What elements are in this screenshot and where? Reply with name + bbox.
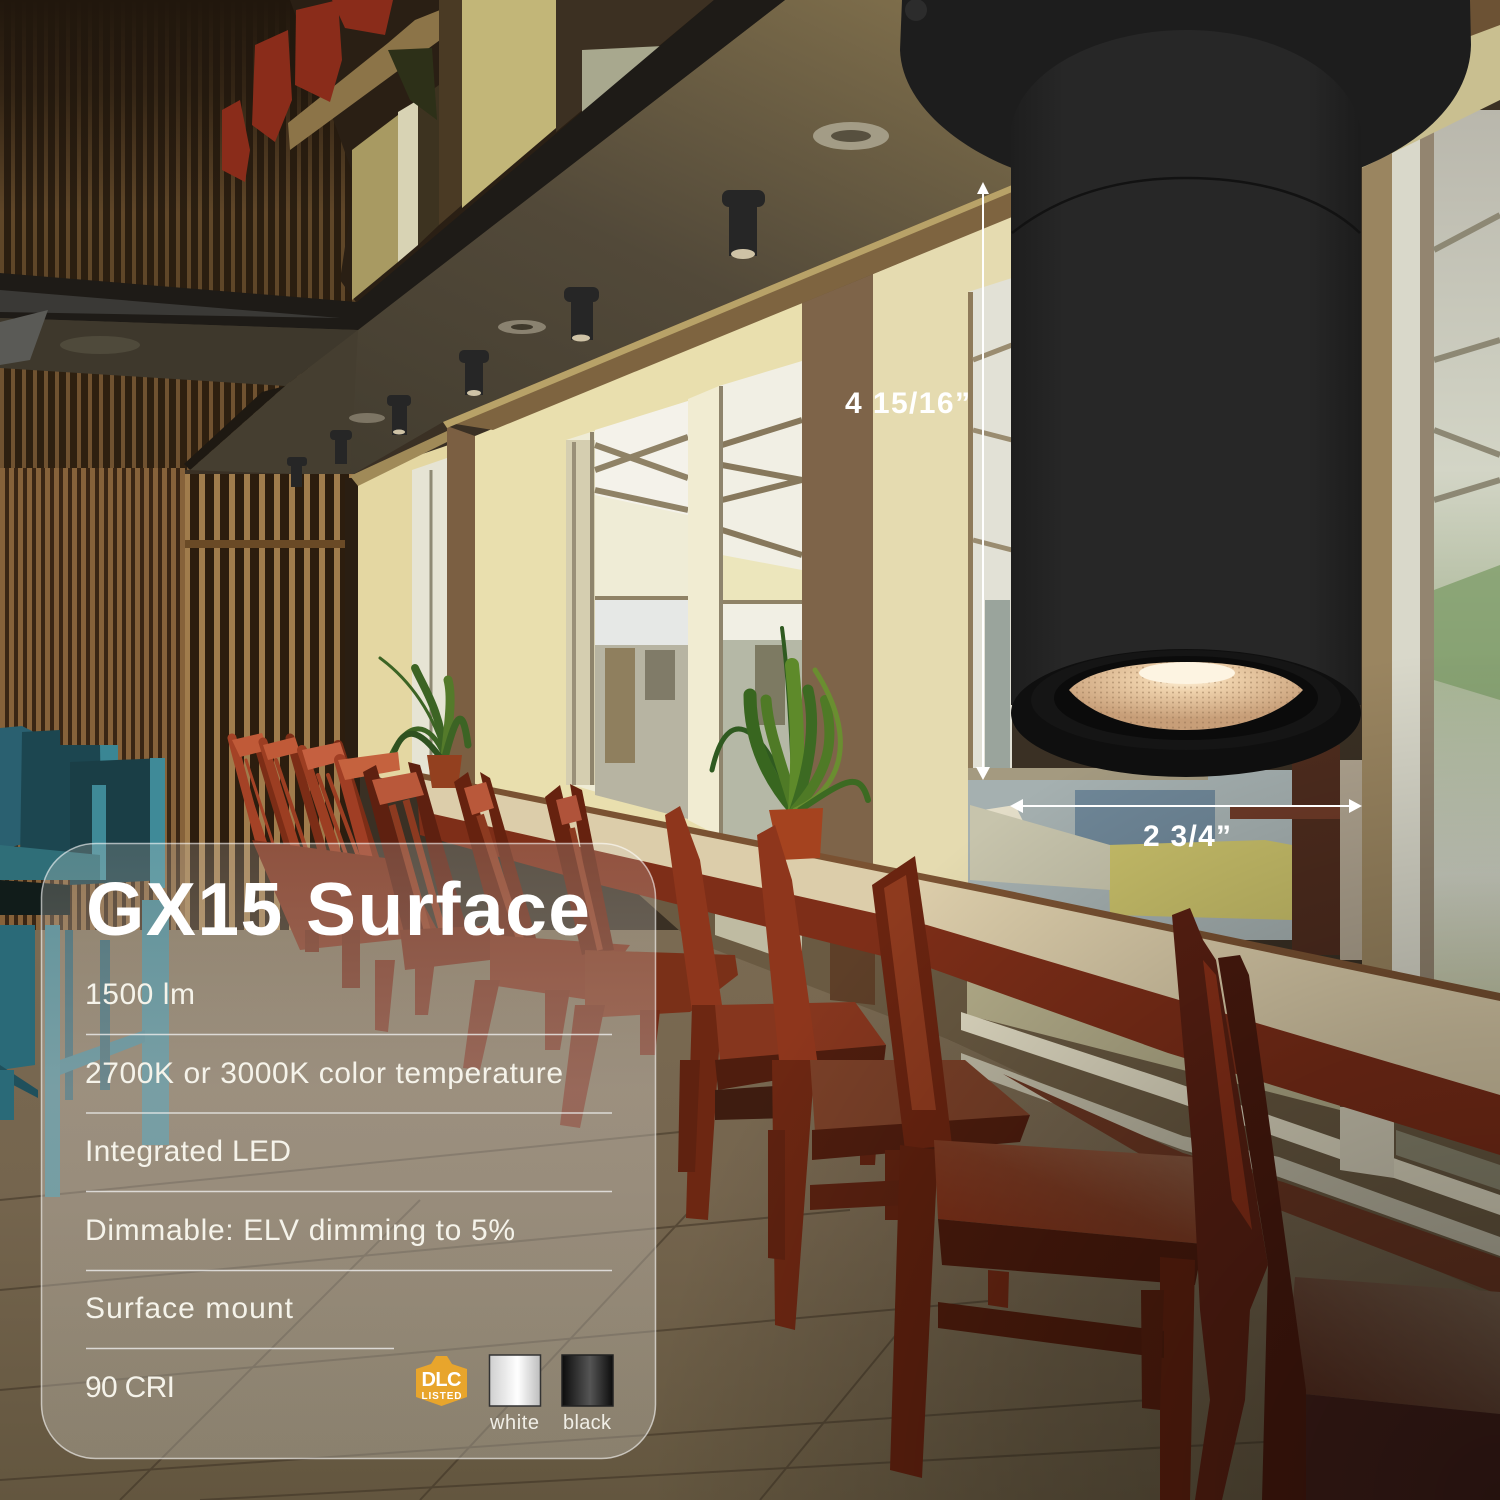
mounting plate — [900, 0, 1471, 168]
potted plants — [380, 628, 868, 860]
icon: DLC listed badge — [416, 1356, 467, 1406]
product: surface-mount cylinder light — [900, 0, 1471, 777]
reflector lens — [1069, 662, 1303, 730]
window 2 — [719, 361, 802, 850]
exterior through right window — [968, 770, 1368, 940]
chair E — [545, 784, 738, 1128]
chair D — [665, 806, 886, 1220]
spec: colour temperature: 2700K or 3000K color temperature — [85, 1057, 563, 1090]
floor — [0, 930, 1500, 1500]
swatch: white: white — [489, 1412, 539, 1434]
dimension: height: 4 15/16” — [845, 387, 970, 420]
ceiling lights — [287, 190, 765, 487]
ceiling — [0, 0, 1012, 476]
dimension: width: 2 3/4” — [1143, 820, 1231, 853]
chair C — [757, 825, 1030, 1330]
right window and frame — [1425, 110, 1500, 1010]
window wall — [358, 0, 1500, 1010]
swatch: white — [489, 1355, 540, 1434]
spec: mount: Surface mount — [85, 1292, 294, 1325]
dimension: height — [845, 182, 990, 780]
swatch: black — [562, 1355, 613, 1434]
swatch: black: black — [563, 1412, 612, 1434]
distant red chairs — [232, 733, 440, 988]
blue chairs — [0, 726, 169, 1197]
chair G — [363, 762, 500, 1032]
title: GX15 Surface — [86, 867, 590, 951]
left wood wall — [0, 318, 360, 949]
cornice — [350, 185, 1012, 486]
counter — [416, 772, 1500, 1155]
icon: DLC listed badge: LISTED — [422, 1391, 462, 1402]
bottom opening — [1011, 649, 1361, 777]
spec: CRI: 90 CRI — [85, 1371, 175, 1404]
panel: specifications — [42, 844, 656, 1458]
ceiling beam — [0, 0, 785, 330]
chair F — [454, 772, 630, 1070]
mirrored ceiling reflection — [0, 0, 725, 305]
window 1 — [566, 401, 688, 819]
under-counter wall and window — [600, 860, 1500, 1300]
spec: lumens: 1500 lm — [85, 978, 195, 1011]
cylinder body — [1011, 30, 1361, 705]
icon: DLC listed badge: DLC — [422, 1369, 462, 1391]
spec: LED: Integrated LED — [85, 1135, 291, 1168]
chair B — [872, 856, 1203, 1500]
dimension: width — [1010, 799, 1362, 853]
chair A — [1172, 908, 1500, 1500]
spec: dimming: Dimmable: ELV dimming to 5% — [85, 1214, 515, 1247]
right window glass — [968, 278, 1012, 780]
ceiling vents — [0, 122, 889, 423]
